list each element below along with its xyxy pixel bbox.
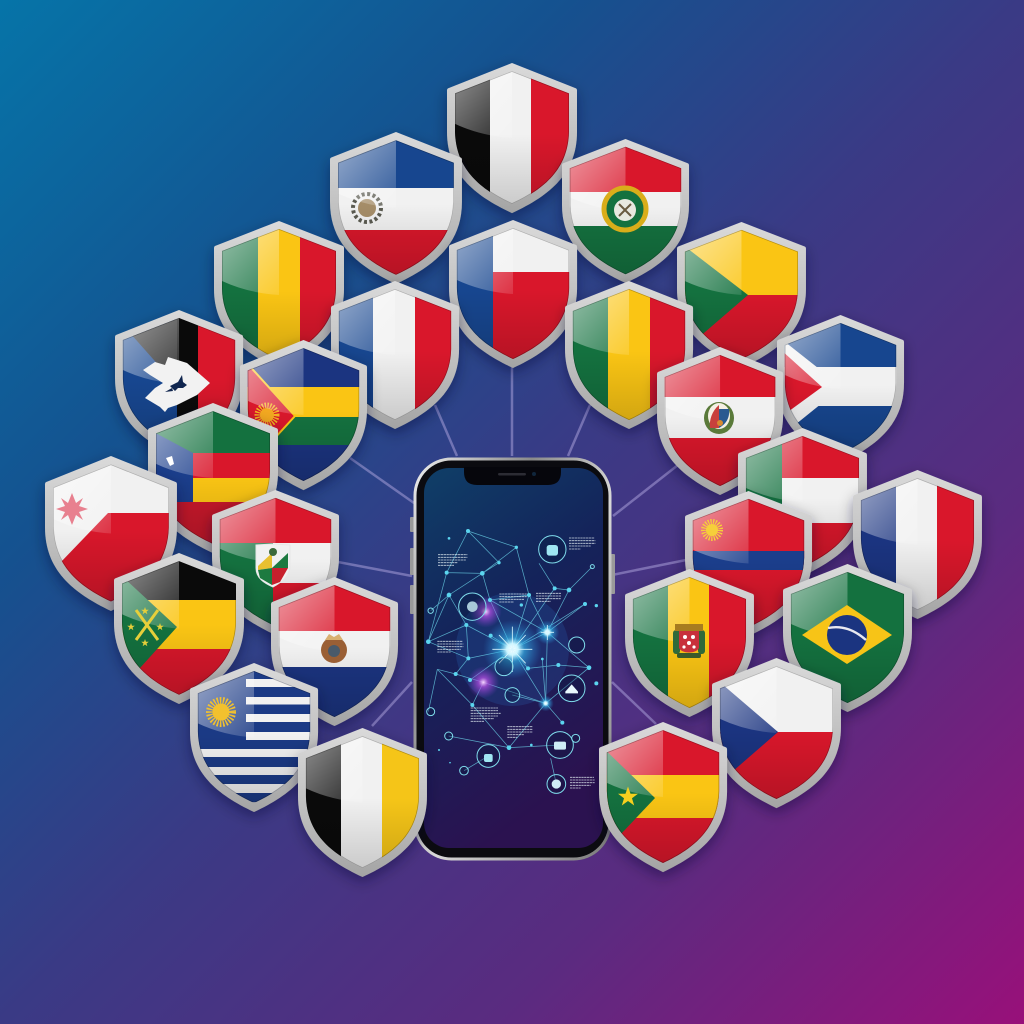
notch <box>464 467 561 485</box>
shield: red yellow with green triangle and star <box>595 718 735 876</box>
shield: red white green with crest <box>205 485 345 643</box>
shield: blue white red lower <box>328 275 465 435</box>
shield: blue white red centre <box>445 215 583 375</box>
shield: green red white <box>730 420 872 580</box>
shield: black white yellow <box>295 725 432 880</box>
shield: red with blue band and sun <box>680 485 820 636</box>
icon: eight-point star <box>56 493 88 525</box>
shield: black white red <box>440 60 581 220</box>
icon: crossed bars and stars <box>127 607 164 646</box>
shield: black red blue with white map <box>110 305 248 458</box>
shield: green yellow red lower <box>560 275 700 435</box>
smartphone <box>410 458 615 860</box>
phone screen <box>424 468 603 848</box>
shield: black yellow red with green hoist <box>110 550 250 709</box>
shield: blue white red right edge <box>850 465 987 625</box>
shield: white red with star <box>40 450 185 615</box>
micro text blocks drawn as lines <box>437 538 595 788</box>
glows <box>467 666 499 698</box>
shield: green with yellow diamond and blue globe <box>780 560 915 715</box>
shield: blue white red with crest <box>325 130 465 290</box>
nodes <box>426 529 598 763</box>
ring icons <box>467 545 578 789</box>
shield: green red yellow with blue hoist <box>145 400 285 557</box>
shield: sun and stripes <box>185 660 326 815</box>
icon: diamond and globe <box>802 605 892 664</box>
shield: red white red with crest <box>650 340 790 498</box>
shield: blue white red with right triangle <box>770 310 910 466</box>
shield: navy yellow green with red triangle <box>235 335 375 495</box>
shield: red white green with roundel <box>555 135 695 286</box>
icon rings <box>427 536 594 793</box>
shield: yellow green red <box>670 215 810 375</box>
shield: green yellow red with crest <box>620 565 759 725</box>
side buttons <box>410 517 615 614</box>
connector lines from phone to shields <box>338 360 686 726</box>
shield: green yellow red <box>210 215 350 375</box>
shield: white red blue triangle <box>708 655 848 812</box>
network diagram <box>426 529 598 793</box>
shield: red white navy with crest <box>265 570 405 732</box>
